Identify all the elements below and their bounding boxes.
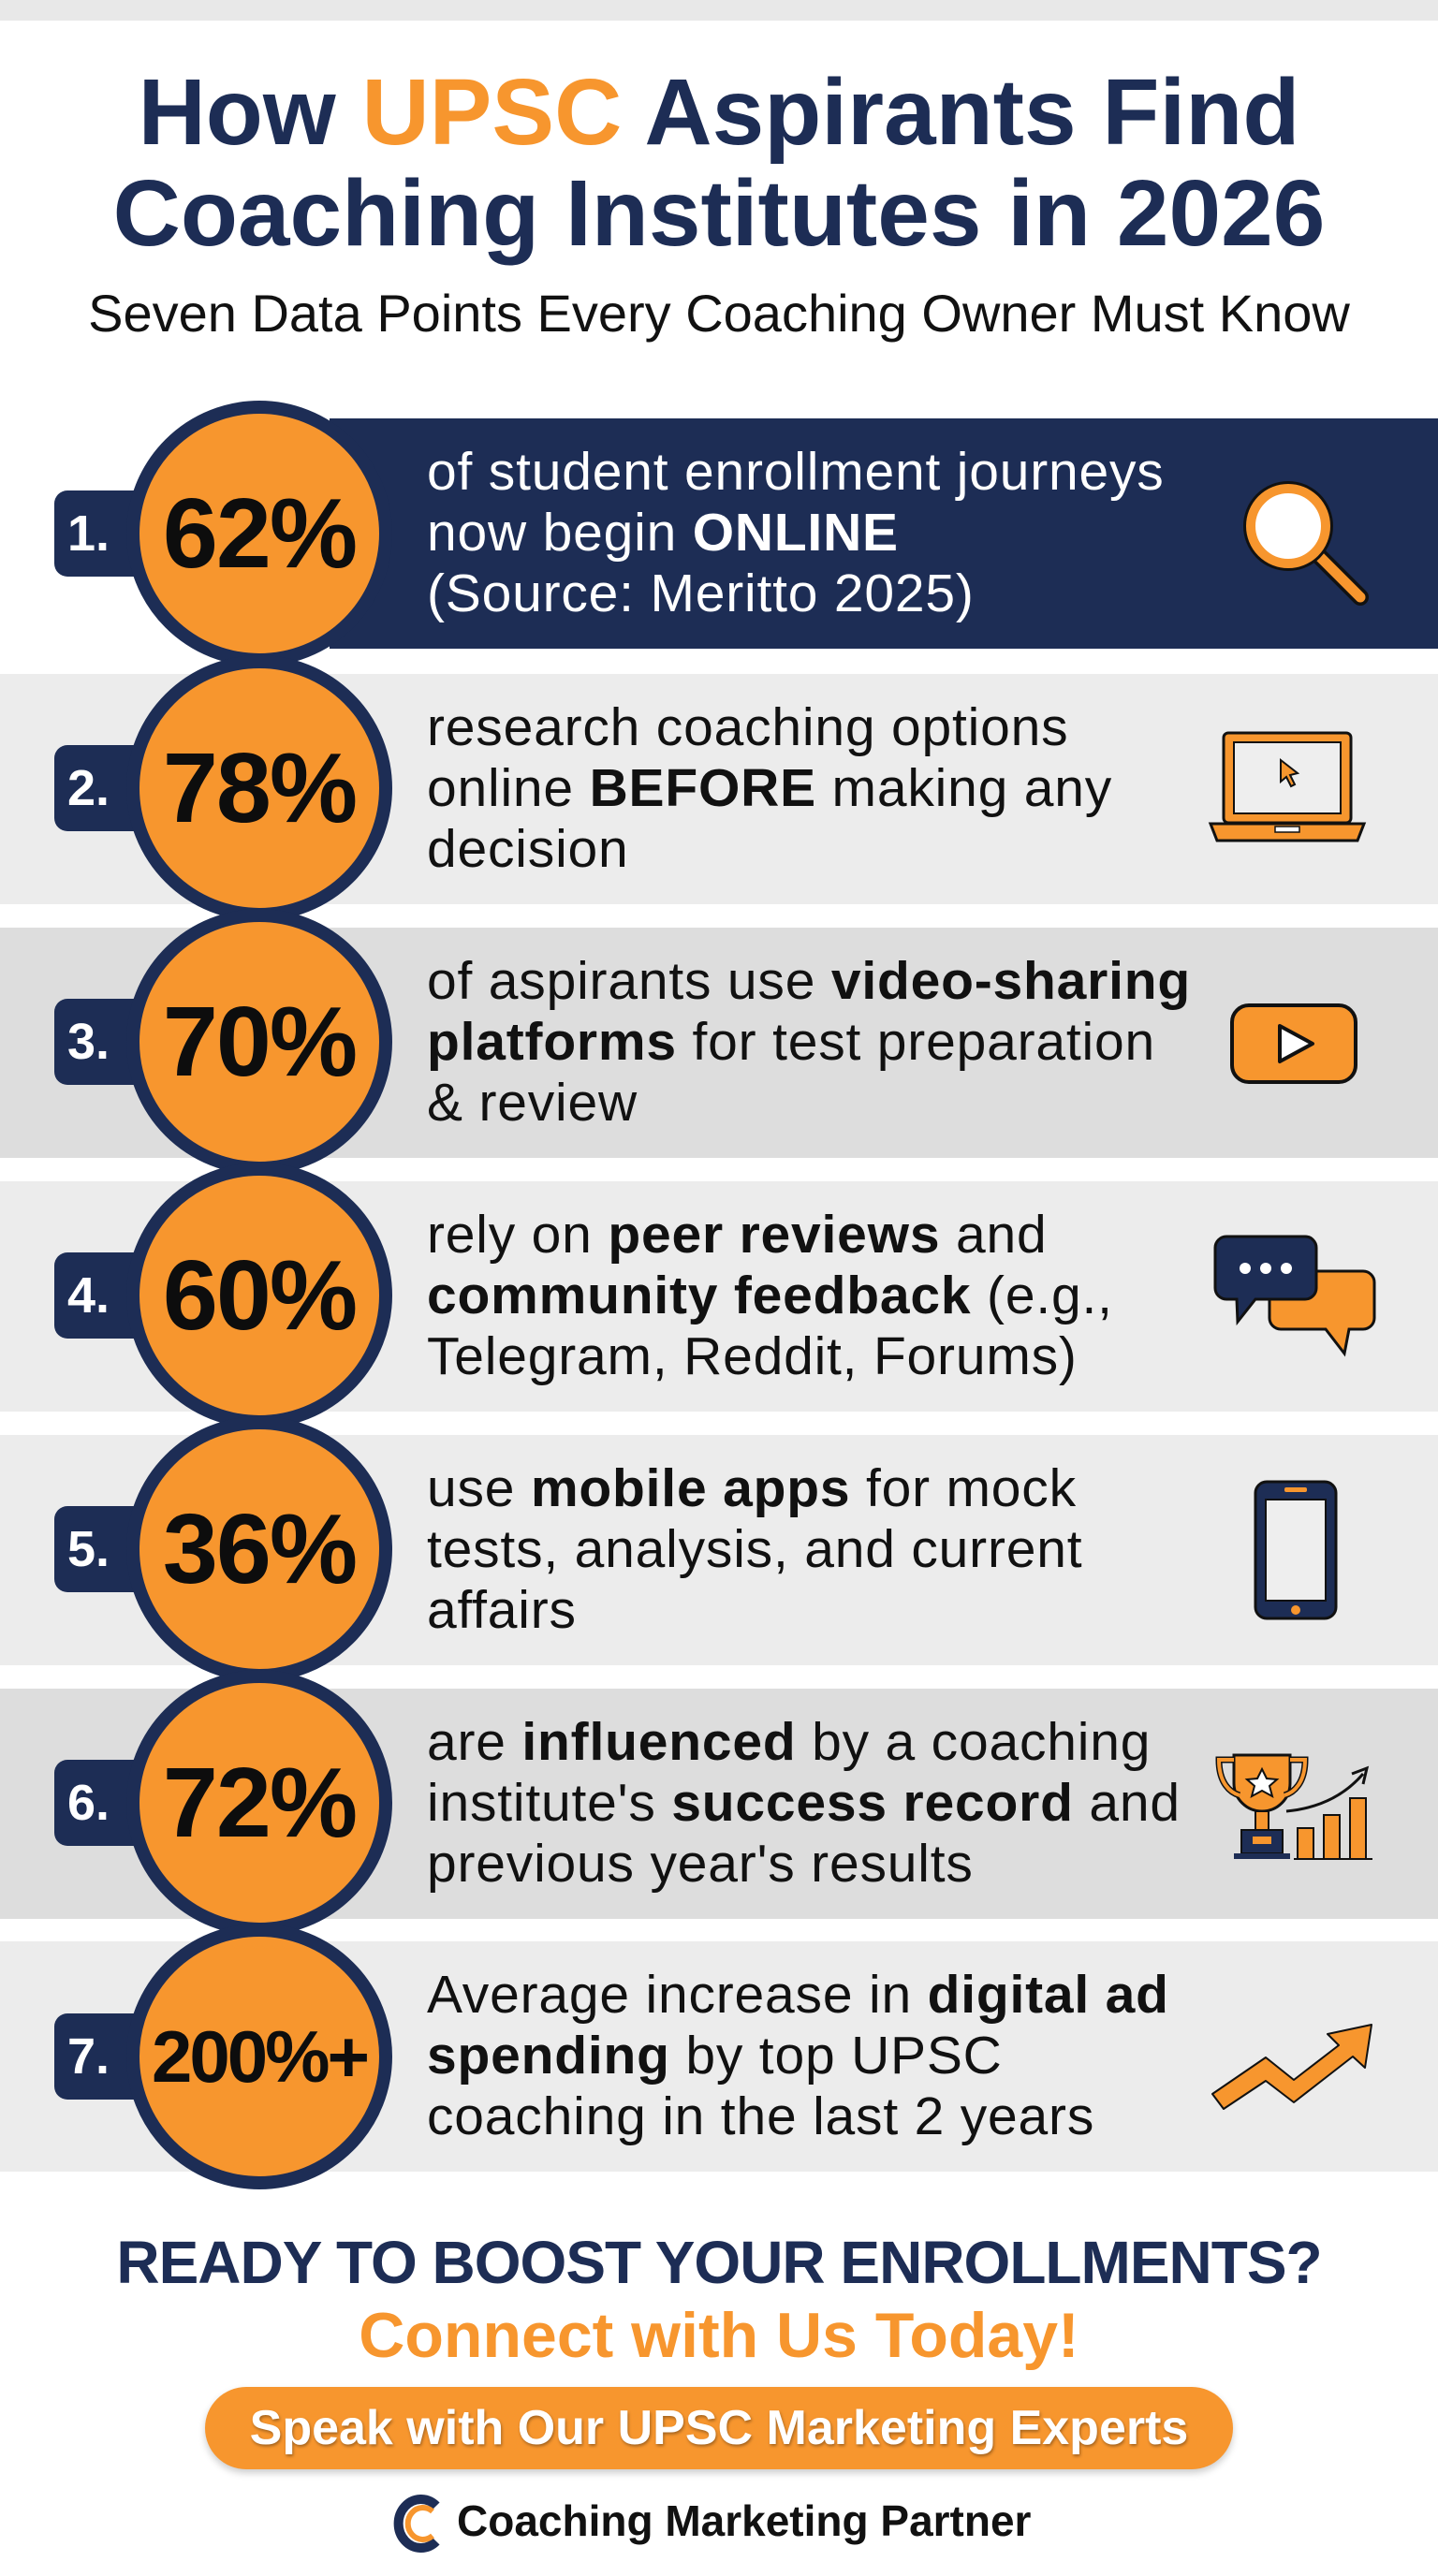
circle 60%: 60% xyxy=(163,1239,356,1350)
cta button: Speak with Our UPSC Marketing Experts xyxy=(250,2401,1188,2455)
icon: chat bubbles xyxy=(1213,1236,1376,1357)
cta subheading: Connect with Us Today! xyxy=(359,2300,1079,2371)
title: Coaching Institutes in 2026 xyxy=(113,161,1325,266)
logo text: Coaching Marketing Partner xyxy=(457,2496,1031,2545)
tab 2 xyxy=(54,745,176,831)
tab 4: 4. xyxy=(67,1267,110,1324)
circle 62%: 62% xyxy=(163,477,356,588)
panel: row 2 xyxy=(0,674,1438,904)
text 1: now begin ONLINE xyxy=(427,503,899,563)
text 7: coaching in the last 2 years xyxy=(427,2086,1094,2146)
circle 60% xyxy=(126,1163,392,1428)
subtitle: Seven Data Points Every Coaching Owner Must Know xyxy=(88,284,1350,343)
text 3: of aspirants use video-sharing xyxy=(427,951,1191,1011)
tab 2: 2. xyxy=(67,760,110,816)
icon: logo mark xyxy=(393,2495,440,2553)
circle 78%: 78% xyxy=(163,732,356,842)
circle 200%+: 200%+ xyxy=(152,2014,367,2097)
text 1 xyxy=(427,442,1165,623)
text 7: Average increase in digital ad xyxy=(427,1965,1169,2025)
cta button xyxy=(205,2387,1233,2469)
panel: row 3 xyxy=(0,928,1438,1158)
text 6 xyxy=(427,1712,1181,1894)
text 4: community feedback (e.g., xyxy=(427,1266,1113,1325)
icon: trend arrow xyxy=(1211,2024,1372,2110)
icon: phone xyxy=(1255,1481,1337,1619)
text 7: spending by top UPSC xyxy=(427,2026,1003,2086)
text 3: platforms for test preparation xyxy=(427,1012,1155,1072)
text 6: are influenced by a coaching xyxy=(427,1712,1151,1772)
text 1: of student enrollment journeys xyxy=(427,442,1165,502)
circle 70% xyxy=(126,909,392,1175)
text 2: decision xyxy=(427,819,629,879)
text 4: Telegram, Reddit, Forums) xyxy=(427,1326,1078,1386)
circle 62% xyxy=(126,401,392,666)
text 2: research coaching options xyxy=(427,697,1068,757)
text 3: & review xyxy=(427,1073,638,1133)
panel: row 1 xyxy=(330,418,1438,649)
circle 72%: 72% xyxy=(163,1747,356,1857)
panel: row 5 xyxy=(0,1435,1438,1665)
tab 3 xyxy=(54,999,176,1085)
icon: magnifier xyxy=(1243,481,1369,606)
tab 6: 6. xyxy=(67,1775,110,1831)
tab 6 xyxy=(54,1760,176,1846)
tab 5: 5. xyxy=(67,1521,110,1577)
text 5: affairs xyxy=(427,1580,577,1640)
tab 3: 3. xyxy=(67,1014,110,1070)
title: How UPSC Aspirants Find xyxy=(139,60,1299,165)
text 2 xyxy=(427,697,1112,879)
circle 36% xyxy=(126,1416,392,1682)
text 6: institute's success record and xyxy=(427,1773,1181,1833)
text 7 xyxy=(427,1965,1169,2146)
circle 70%: 70% xyxy=(163,987,356,1097)
panel: row 7 xyxy=(0,1941,1438,2172)
text 5: tests, analysis, and current xyxy=(427,1519,1082,1579)
cta heading: READY TO BOOST YOUR ENROLLMENTS? xyxy=(116,2229,1322,2296)
icon: video play xyxy=(1230,1003,1357,1084)
tab 1 xyxy=(54,490,176,577)
title xyxy=(113,60,1325,266)
tab 7: 7. xyxy=(67,2028,110,2085)
circle 78% xyxy=(126,655,392,921)
tab 1: 1. xyxy=(67,505,110,562)
circle 200%+ xyxy=(126,1924,392,2189)
tab 4 xyxy=(54,1252,176,1339)
tab 7 xyxy=(54,2013,176,2100)
panel: row 4 xyxy=(0,1181,1438,1412)
tab 5 xyxy=(54,1506,176,1592)
text 1: (Source: Meritto 2025) xyxy=(427,564,975,623)
text 5 xyxy=(427,1458,1082,1640)
text 6: previous year's results xyxy=(427,1834,974,1894)
circle 72% xyxy=(126,1670,392,1936)
text 3 xyxy=(427,951,1191,1133)
text 5: use mobile apps for mock xyxy=(427,1458,1077,1518)
circle 36%: 36% xyxy=(163,1494,356,1604)
panel: row 6 xyxy=(0,1689,1438,1919)
icon: laptop xyxy=(1208,732,1367,842)
logo xyxy=(393,2495,1031,2553)
top strip xyxy=(0,0,1438,21)
text 2: online BEFORE making any xyxy=(427,758,1112,818)
text 4 xyxy=(427,1205,1113,1386)
text 4: rely on peer reviews and xyxy=(427,1205,1047,1265)
icon: trophy with chart xyxy=(1215,1754,1372,1860)
